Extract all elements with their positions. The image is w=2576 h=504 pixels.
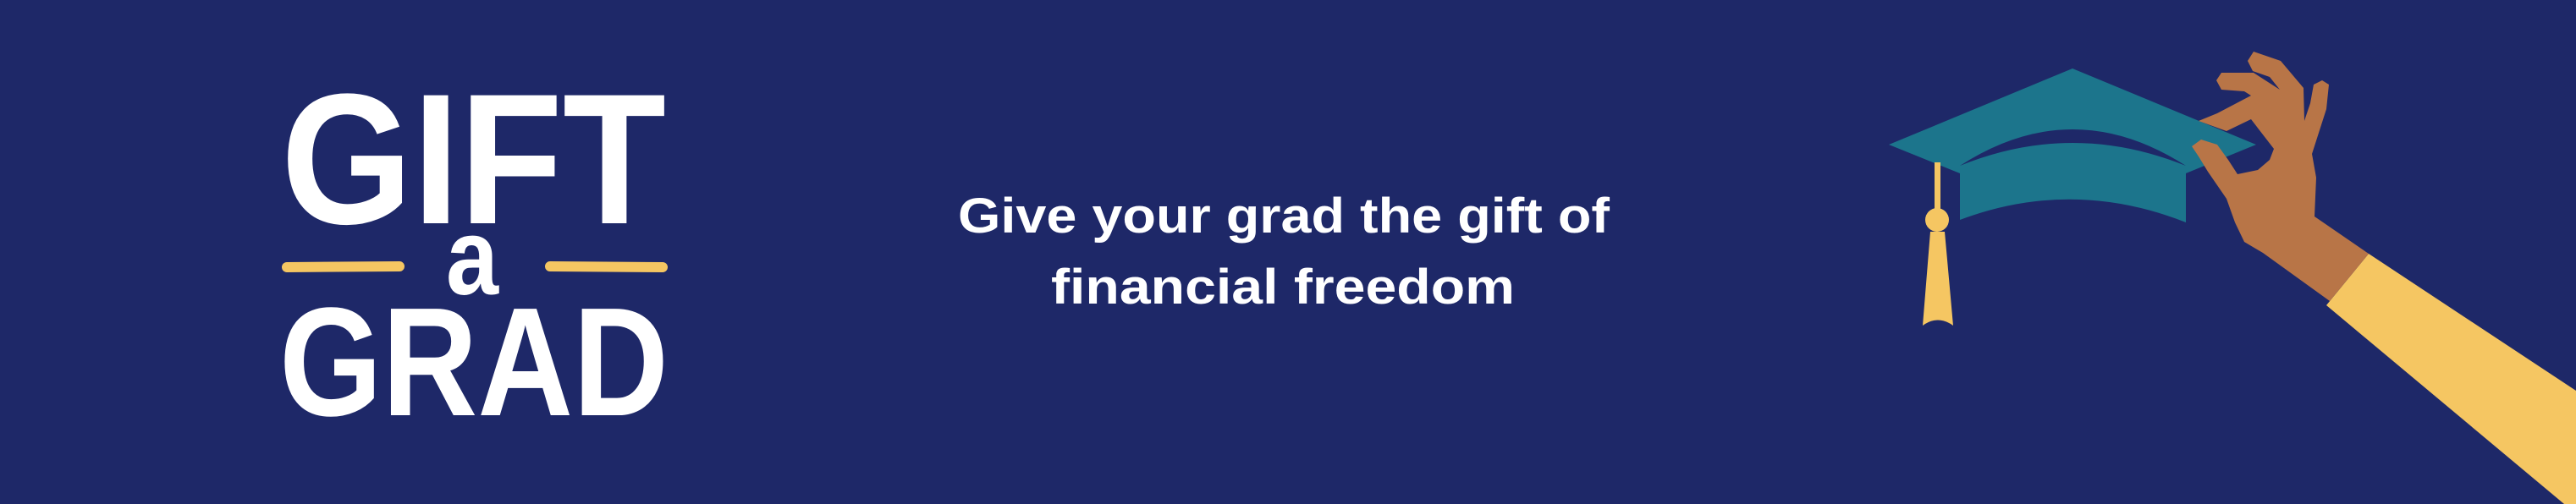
tagline: financial freedom (1051, 260, 1515, 315)
logo word: a: a (446, 197, 499, 318)
logo: GIFT a GRAD (279, 55, 669, 448)
illustration: hand (2192, 52, 2369, 301)
logo underline left (287, 266, 399, 267)
illustration: arm sleeve (2326, 254, 2576, 504)
illustration: graduation cap (1889, 68, 2256, 326)
logo word: GIFT: GIFT (281, 55, 666, 263)
tassel (1923, 162, 1953, 326)
tagline (958, 189, 1610, 315)
cap board (1889, 68, 2256, 173)
logo underline right (550, 266, 663, 267)
logo word: GRAD: GRAD (279, 275, 669, 448)
tagline: Give your grad the gift of (958, 189, 1610, 244)
cap band (1960, 143, 2186, 222)
